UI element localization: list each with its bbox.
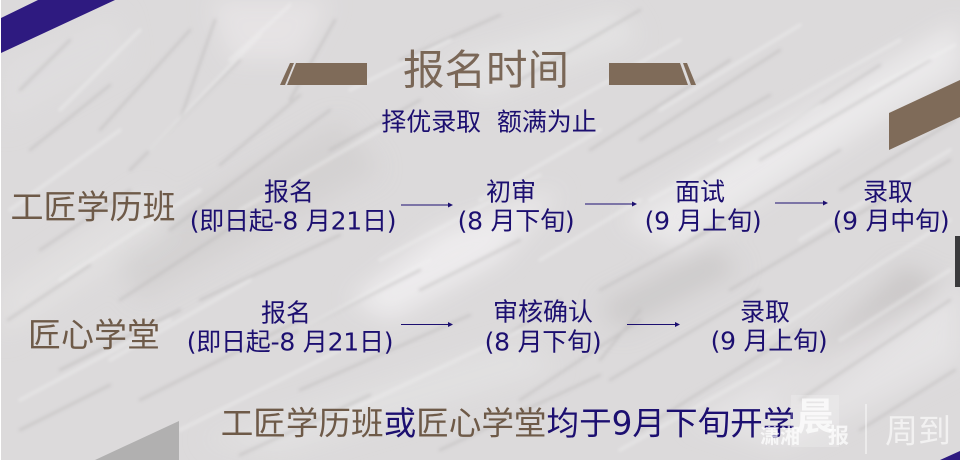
date: 录取: (9 月中旬)	[833, 206, 949, 236]
watermark divider	[865, 404, 867, 454]
bottom note: 工匠学历班或匠心学堂均于9月下旬开学	[221, 405, 795, 443]
arrow: 审核确认 to 录取	[627, 322, 680, 327]
watermark: 潇湘晨报	[760, 395, 849, 448]
watermark: 潇湘晨报: 潇湘	[760, 424, 800, 448]
title right ornament	[609, 63, 696, 85]
step: 录取: 录取	[863, 178, 913, 206]
date: 初审: (8 月下旬)	[458, 206, 574, 236]
date: 报名: (即日起-8 月21日)	[190, 206, 396, 236]
step: 报名 second row: 报名	[261, 298, 311, 328]
date: 录取 second row: (9 月上旬)	[711, 326, 827, 356]
watermark: 周到: 周到	[885, 412, 951, 450]
right brown band	[889, 80, 960, 150]
right edge tab	[955, 236, 960, 287]
subtitle: 择优录取 额满为止	[381, 108, 597, 136]
step: 初审: 初审	[486, 178, 536, 206]
date: 报名 second row: (即日起-8 月21日)	[187, 328, 393, 356]
watermark: 潇湘晨报: 报	[828, 424, 849, 448]
row label: 工匠学历班: 工匠学历班	[10, 188, 176, 226]
bottom edge strip	[0, 460, 960, 464]
step: 录取 second row: 录取	[740, 298, 790, 326]
date: 审核确认: (8 月下旬)	[485, 328, 601, 356]
arrow: 初审 to 面试	[585, 202, 637, 206]
arrow: 报名 to 审核确认	[401, 322, 453, 327]
arrow: 面试 to 录取	[775, 200, 828, 206]
title left ornament	[280, 63, 367, 85]
title: 报名时间	[403, 45, 569, 94]
row label: 匠心学堂: 匠心学堂	[28, 316, 160, 354]
step: 面试: 面试	[675, 178, 725, 206]
bottom-left grey triangle	[95, 421, 179, 460]
bottom-right purple corner	[940, 451, 960, 460]
step: 审核确认: 审核确认	[493, 298, 593, 326]
left edge strip	[0, 0, 1, 464]
top-left purple band	[1, 0, 115, 53]
arrow: 报名 to 初审	[401, 202, 453, 208]
date: 面试: (9 月上旬)	[645, 206, 761, 236]
step: 报名: 报名	[264, 178, 314, 206]
watermark: 潇湘晨报: 晨	[796, 395, 834, 439]
